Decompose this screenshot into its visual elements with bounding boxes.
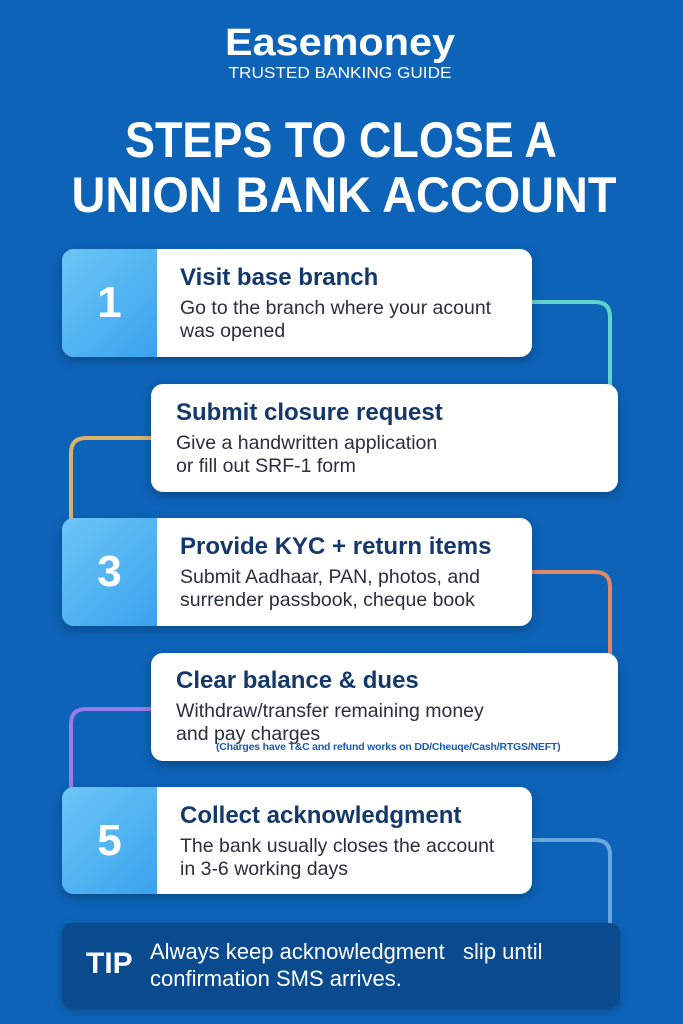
step 1: Visit base branch: [180, 264, 378, 291]
header: [72, 22, 616, 223]
brand name: Easemoney: [225, 22, 455, 64]
step 5: in 3-6 working days: [180, 858, 348, 880]
tip box: [62, 923, 620, 1008]
step 1: [62, 249, 532, 357]
step 1: was opened: [180, 320, 285, 342]
step 4: and pay charges: [176, 723, 320, 745]
tagline: TRUSTED BANKING GUIDE: [228, 65, 452, 82]
step 2: or fill out SRF-1 form: [176, 455, 356, 477]
title: STEPS TO CLOSE A: [125, 112, 557, 168]
step 5: [62, 787, 532, 894]
tip box: TIP: [86, 947, 133, 980]
step 3: surrender passbook, cheque book: [180, 589, 475, 611]
title: [72, 112, 616, 223]
step 3: 3: [97, 547, 122, 596]
step 2: Submit closure request: [176, 399, 443, 426]
step 5: The bank usually closes the account: [180, 835, 494, 857]
step 4: Clear balance & dues: [176, 667, 419, 694]
step 1: Go to the branch where your acount: [180, 297, 491, 319]
footnote: (Charges have T&C and refund works on DD/Cheuqe/Cash/RTGS/NEFT): [216, 741, 560, 753]
title: UNION BANK ACCOUNT: [72, 167, 616, 223]
step 1: 1: [97, 278, 122, 327]
step 3: [62, 518, 532, 626]
step 2: [151, 384, 618, 492]
step 2: Give a handwritten application: [176, 432, 437, 454]
step 3: Submit Aadhaar, PAN, photos, and: [180, 566, 480, 588]
tip box: confirmation SMS arrives.: [150, 966, 402, 991]
step 5: Collect acknowledgment: [180, 802, 461, 829]
step 5: 5: [97, 816, 122, 864]
step 4: [151, 653, 618, 761]
step 3: Provide KYC + return items: [180, 533, 491, 560]
tip box: Always keep acknowledgment slip until: [150, 939, 543, 964]
step 4: Withdraw/transfer remaining money: [176, 700, 484, 722]
